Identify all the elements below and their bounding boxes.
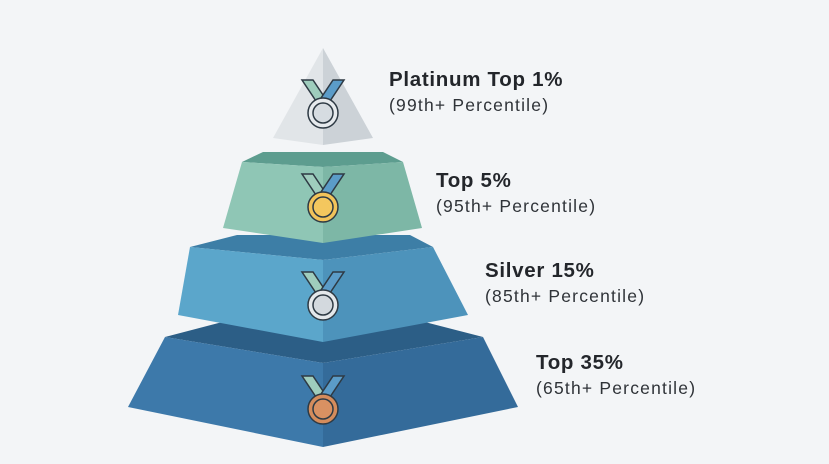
label: platinum: Platinum Top 1% [389,68,563,91]
tier 4: bottom layer [128,320,518,447]
tier 2: top 5% layer [223,152,422,243]
tier 3: silver layer [178,235,468,342]
label: top 5%: Top 5% [436,169,512,192]
tier 1: platinum apex [273,48,373,145]
label: top 5%: (95th+ Percentile) [436,196,596,216]
icon: platinum medal [302,80,344,128]
label: platinum [389,68,563,114]
label: top 35% [536,351,696,398]
label: top 35%: (65th+ Percentile) [536,378,696,398]
label: platinum: (99th+ Percentile) [389,94,549,114]
label: silver [485,259,645,306]
label: silver: (85th+ Percentile) [485,286,645,306]
icon: silver medal [302,272,344,320]
icon: gold medal [302,174,344,222]
icon: bronze medal [302,376,344,424]
label: top 5% [436,169,596,216]
label: top 35%: Top 35% [536,351,624,374]
label: silver: Silver 15% [485,259,595,282]
